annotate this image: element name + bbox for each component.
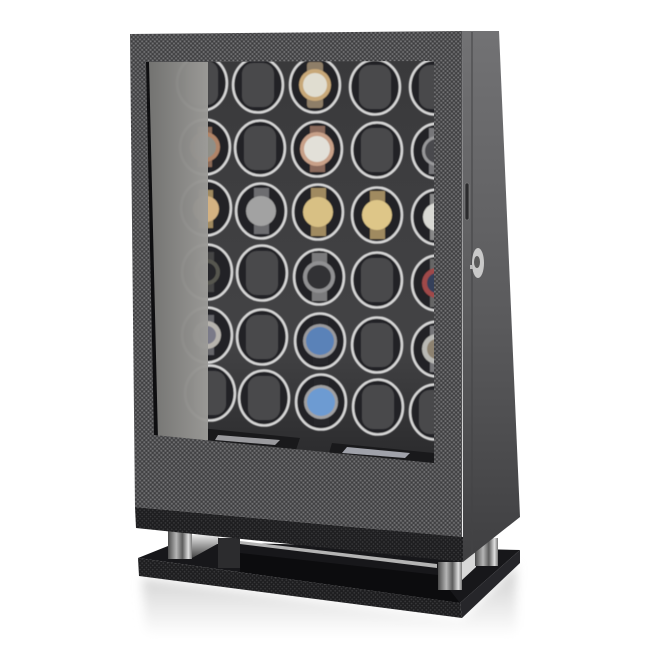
display strip left (195, 428, 300, 450)
watch slots: row 6 (208, 364, 434, 442)
lower carbon band (135, 507, 463, 562)
base plate (138, 535, 520, 618)
watch slots: row 2 (208, 118, 434, 180)
floor shadow (142, 565, 516, 636)
glass glare (146, 62, 208, 445)
soft-focus slots and watches (184, 61, 434, 442)
cabinet side face (462, 31, 520, 562)
product illustration: watch winder cabinet (130, 31, 520, 624)
watch slots: row 5 (208, 306, 434, 378)
display strip right (329, 443, 434, 463)
watch slots: row 3 (208, 178, 434, 246)
side slot (465, 183, 469, 220)
glass left inner shadow (145, 62, 158, 440)
watch slots: row 1 (184, 61, 434, 116)
legs (168, 530, 498, 590)
cabinet front frame (130, 31, 462, 537)
lock (470, 248, 484, 278)
watch slots: row 4 (208, 242, 434, 312)
watches (208, 62, 434, 420)
glass window (146, 61, 434, 463)
